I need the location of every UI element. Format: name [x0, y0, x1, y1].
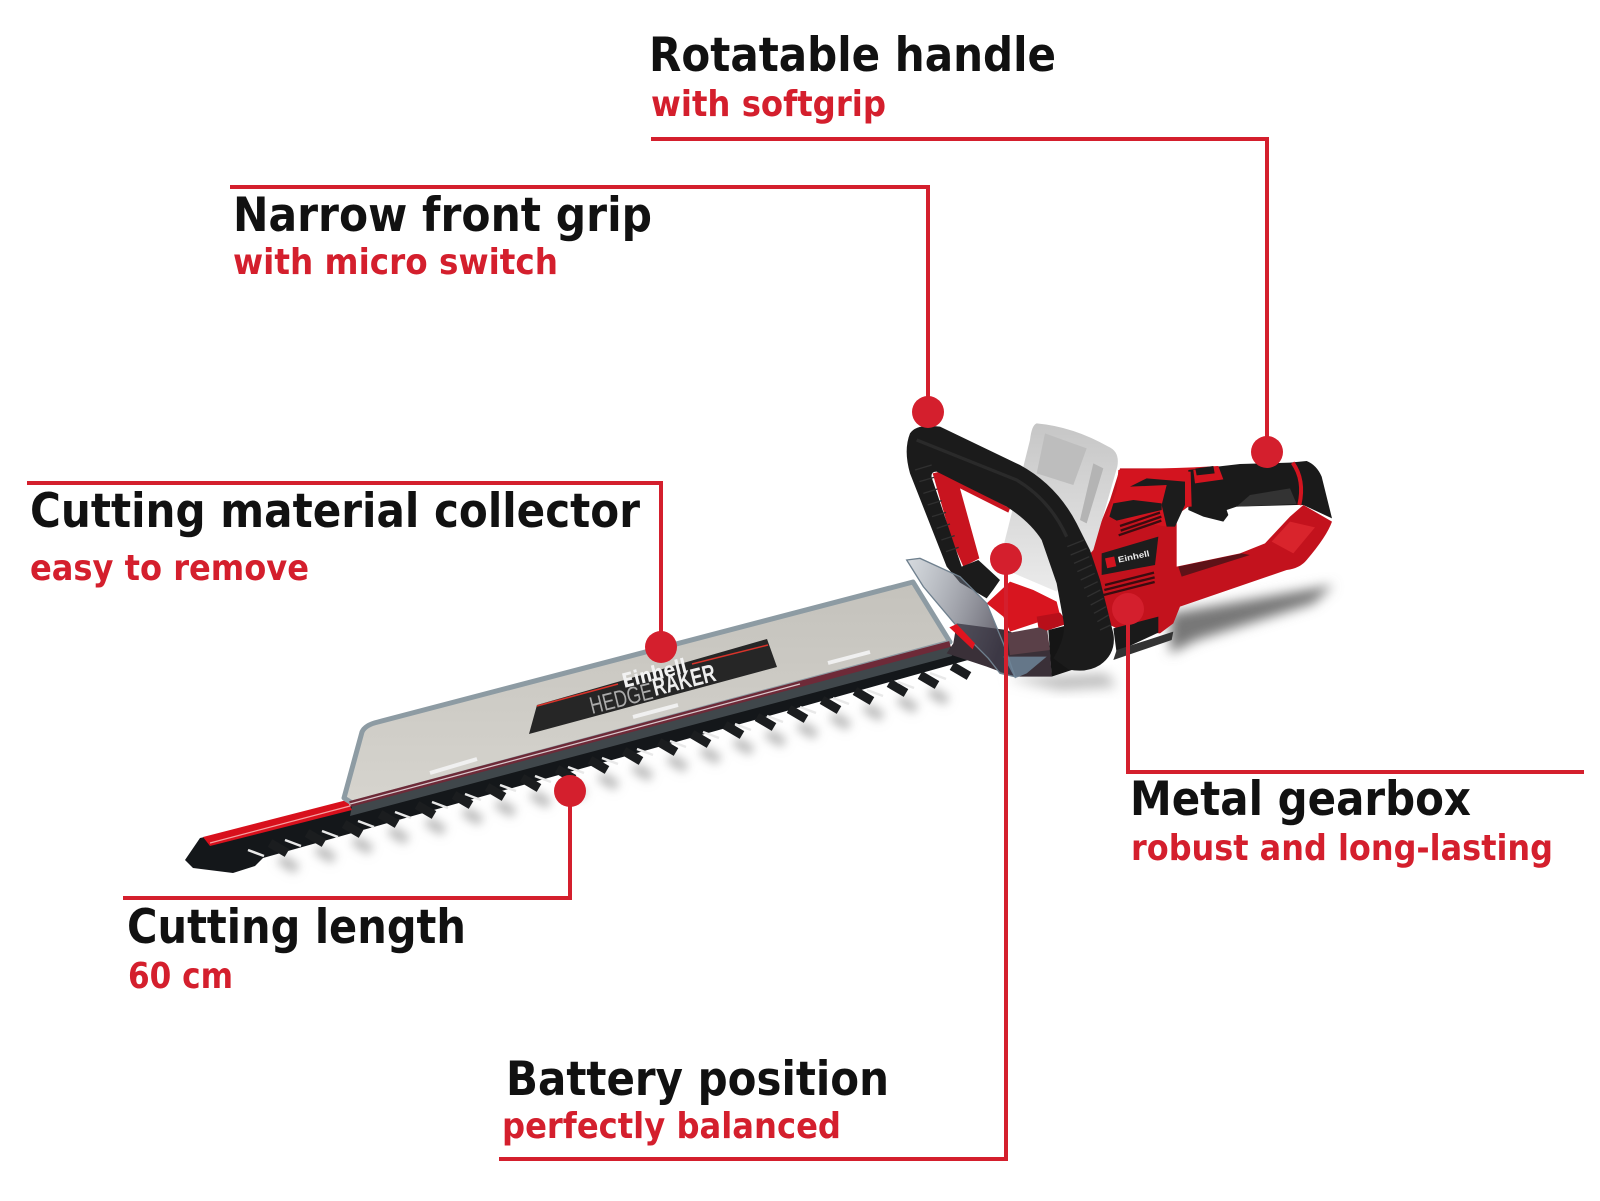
subheading: robust and long-lasting: [1131, 828, 1553, 869]
logo text: Einhell: [1117, 548, 1150, 565]
tube inner edge: [1178, 553, 1250, 577]
housing black wedge: [1109, 500, 1162, 521]
blade teeth: black fingers: [270, 666, 969, 853]
leader line: [230, 187, 928, 412]
brand plate: [1102, 537, 1158, 575]
grip red ring front: [1188, 472, 1189, 507]
under shade: [1113, 632, 1173, 660]
dark base behind guard: [947, 623, 1052, 677]
cover label plate: [529, 639, 777, 734]
callout: metal gearbox: [1112, 593, 1584, 869]
marker dot: [990, 543, 1022, 575]
housing black pillar: [1130, 478, 1185, 527]
guard lower tab: [1003, 657, 1047, 678]
motor black end: [1048, 625, 1077, 677]
plate HEDGE text: HEDGE: [587, 678, 656, 720]
marker dot: [1112, 593, 1144, 625]
heading: Cutting length: [127, 900, 466, 955]
red bar clip: [949, 624, 975, 649]
blade teeth: metal edges: [248, 673, 946, 856]
front wrap handle: [907, 426, 1114, 671]
callout: cutting length: [123, 775, 586, 997]
marker dot: [1251, 436, 1283, 468]
leader line: [27, 483, 661, 647]
guard shield: [907, 558, 1015, 677]
plate red line: [537, 645, 768, 706]
handle sheen: [917, 440, 1067, 537]
grip red band rear: [1293, 463, 1301, 505]
rear housing and tube: [1083, 468, 1332, 633]
heading: Battery position: [506, 1052, 889, 1107]
battery side rail: [1080, 463, 1103, 523]
plate brand text: Einhell: [619, 654, 689, 693]
ground shadow: [1170, 585, 1333, 653]
leader line: [123, 791, 570, 898]
logo square: [1105, 556, 1116, 568]
handle red slider: [1193, 466, 1223, 483]
tube highlight: [1272, 522, 1315, 553]
heading: Rotatable handle: [649, 28, 1056, 83]
heading: Narrow front grip: [233, 188, 652, 243]
motor dark housing: [1007, 626, 1050, 655]
front red housing: [987, 582, 1060, 632]
bottom vents: [1104, 573, 1155, 595]
cutting bar dark body: [185, 646, 968, 873]
heading: Metal gearbox: [1130, 772, 1471, 827]
battery: [1003, 423, 1118, 592]
grip lower insert: [1237, 488, 1297, 507]
subheading: with micro switch: [233, 242, 558, 283]
cover strip highlight: [350, 684, 800, 804]
blade teeth shadow: [280, 691, 947, 869]
slider notch: [1195, 466, 1215, 475]
cover clips: [430, 652, 870, 773]
leader line: [651, 139, 1267, 452]
subheading: 60 cm: [128, 956, 233, 997]
front red collar: [1037, 613, 1068, 631]
leader line: [499, 559, 1006, 1159]
callout: battery position: [499, 543, 1022, 1159]
battery recess: [1037, 433, 1087, 485]
subheading: perfectly balanced: [502, 1106, 841, 1147]
cover edge strip: [350, 644, 950, 804]
marker dot: [912, 396, 944, 428]
subheading: with softgrip: [651, 84, 886, 125]
top vents: [1119, 513, 1161, 535]
grey spine: [350, 646, 952, 816]
callout: cutting material collector: [27, 483, 677, 663]
plate RAKER text: RAKER: [650, 659, 719, 702]
material collector cover: [344, 582, 950, 803]
marker dot: [645, 631, 677, 663]
leader line: [1128, 609, 1584, 772]
subheading: easy to remove: [30, 548, 309, 589]
product: hedge trimmer: [185, 423, 1333, 873]
front brace: [933, 472, 1010, 567]
handle ribs: [915, 465, 1111, 630]
handle assembly: [907, 423, 1333, 690]
heading: Cutting material collector: [30, 484, 641, 539]
floor shadow front: [1007, 673, 1117, 690]
red tip guard: [203, 800, 352, 846]
rear grip softgrip: [1188, 461, 1332, 522]
tip guard highlight: [210, 806, 350, 843]
lower black foot: [1113, 617, 1158, 653]
callout: rotatable handle: [649, 28, 1283, 468]
marker dot: [554, 775, 586, 807]
callout: narrow front grip: [230, 187, 944, 428]
top housing: [1107, 466, 1223, 527]
